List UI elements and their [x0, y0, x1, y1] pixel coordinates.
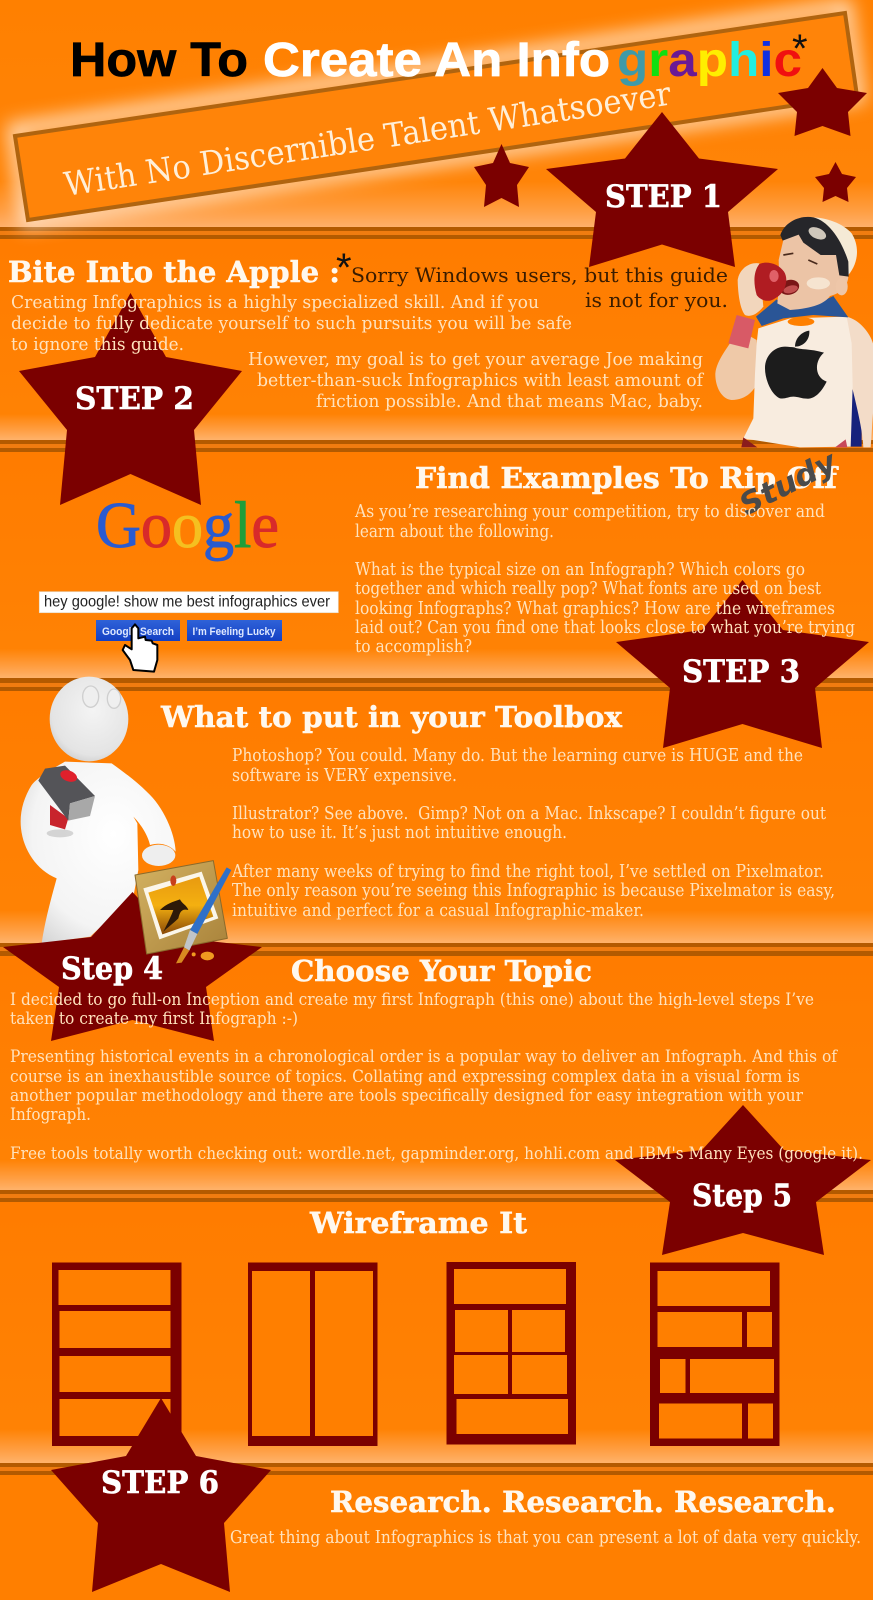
text: step 2 goal: friction possible. And that means Mac, baby. [316, 391, 703, 412]
banner [15, 13, 857, 220]
star: step 5 [615, 1105, 871, 1255]
note: sorry windows users: Sorry Windows users, but this guide [351, 263, 728, 287]
google logo: Google [96, 489, 279, 562]
scarf [756, 296, 848, 326]
icon: pixelmator app [135, 861, 231, 963]
hand [738, 263, 763, 316]
wireframe 1: stacked rows [52, 1262, 182, 1446]
note: sorry windows users [351, 263, 728, 312]
decorative star: top right [778, 68, 867, 136]
star: step 2 [19, 293, 242, 505]
shorts [741, 437, 757, 447]
text: choose your topic: I decided to go full-on Inception and create my first Infograph (this one) about the high-level steps I’ve [10, 990, 814, 1010]
text: choose your topic: taken to create my first Infograph :-) [10, 1009, 298, 1029]
text: toolbox [231, 745, 835, 921]
text: toolbox: how to use it. It’s just not intuitive enough. [232, 822, 567, 843]
title: graphic [617, 34, 802, 87]
text: step 3 research: learn about the following. [355, 521, 554, 542]
heading: toolbox: What to put in your Toolbox [160, 700, 623, 734]
text: step 2 goal [248, 349, 704, 412]
mouth [778, 278, 801, 297]
heading: bite into the apple: Bite Into the Apple : [8, 255, 340, 289]
text: step 2 intro [11, 292, 572, 355]
cap [797, 217, 857, 275]
eyes [83, 686, 99, 707]
subtitle: With No Discernible Talent Whatsoever [61, 74, 674, 204]
heading: wireframe it: Wireframe It [309, 1206, 528, 1240]
wireframe 3: grid with header and footer [446, 1262, 576, 1444]
arm shadow [47, 829, 73, 837]
text: step 2 goal: better-than-suck Infographics with least amount of [257, 370, 704, 391]
star: step 6 [51, 1398, 271, 1592]
wireframe 2: two columns [248, 1262, 378, 1446]
text: toolbox: intuitive and perfect for a casual Infographic-maker. [232, 900, 644, 921]
heading: research: Research. Research. Research. [330, 1485, 836, 1519]
text: step 3 research [354, 501, 855, 657]
shirt [743, 317, 853, 447]
hand on case [142, 845, 175, 866]
heading: choose your topic: Choose Your Topic [291, 954, 592, 988]
pin [170, 875, 176, 886]
icon: white figure with hammer [21, 677, 176, 943]
title asterisk: * [792, 27, 808, 71]
scribble: study: Study [734, 444, 844, 523]
search box: hey google! show me best infographics ever [44, 594, 331, 610]
label: step 3: STEP 3 [682, 654, 800, 690]
right arm [847, 317, 873, 447]
hammer button [59, 768, 79, 784]
eye lines [783, 253, 817, 264]
text: step 2 goal: However, my goal is to get your average Joe making [248, 349, 703, 370]
text: step 2 intro: to ignore this guide. [11, 334, 184, 355]
title [70, 34, 802, 87]
neck hole [788, 317, 814, 326]
icon: boy in cape biting an apple [715, 217, 873, 447]
goggles [780, 217, 849, 277]
text: step 2 intro: Creating Infographics is a highly specialized skill. And if you [11, 292, 539, 313]
wireframe 4: mixed blocks [650, 1262, 780, 1446]
text: choose your topic [10, 990, 863, 1164]
title: Create An Info [263, 34, 610, 87]
text: choose your topic: course is an inexhaustible source of topics. Collating and expressing complex data in a visual form is [10, 1067, 800, 1087]
label: step 2: STEP 2 [75, 381, 194, 417]
decorative star: small left [474, 144, 529, 207]
left arm [715, 332, 758, 400]
button: google search: Google Search [102, 626, 174, 638]
wood board [135, 861, 227, 954]
brush [190, 867, 231, 934]
hammer head [38, 766, 95, 821]
button: feeling lucky: I’m Feeling Lucky [192, 626, 276, 638]
button: google search [96, 620, 180, 641]
wristband [728, 315, 755, 348]
title: How To [70, 34, 248, 87]
text: step 3 research: to accomplish? [355, 636, 472, 657]
decorative star: small right [815, 162, 856, 202]
star: step 4 [3, 892, 262, 1041]
note: sorry windows users: is not for you. [585, 288, 728, 312]
label: step 1: STEP 1 [605, 179, 722, 215]
heading: find examples: Find Examples To Rip Off [415, 461, 839, 495]
face [777, 233, 848, 310]
text: step 2 intro: decide to fully dedicate yourself to such pursuits you will be safe [11, 313, 572, 334]
label: step 4: Step 4 [61, 951, 163, 987]
text: step 3 research: What is the typical size on an Infograph? Which colors go [355, 559, 805, 580]
apple [754, 263, 786, 301]
section dividers [0, 227, 873, 1475]
asterisk: * [336, 246, 352, 290]
star: step 3 [616, 580, 869, 748]
text: choose your topic: Infograph. [10, 1105, 91, 1125]
apple logo [765, 347, 827, 399]
photo frame [143, 872, 218, 939]
text: toolbox: software is VERY expensive. [232, 765, 457, 786]
head [50, 677, 128, 761]
button: feeling lucky [187, 620, 282, 641]
paint splashes [201, 952, 214, 960]
icon: hand cursor [123, 624, 157, 672]
banner glow [15, 7, 857, 220]
cape [843, 380, 862, 447]
star: step 1 [546, 112, 778, 267]
photo [148, 877, 213, 934]
palm tree [160, 899, 188, 932]
hammer handle [50, 805, 68, 829]
label: step 5: Step 5 [692, 1178, 792, 1214]
body [21, 762, 176, 943]
label: step 6: STEP 6 [101, 1465, 219, 1501]
text: choose your topic: another popular methodology and there are tools specifically designed for easy integration with your [10, 1086, 804, 1106]
